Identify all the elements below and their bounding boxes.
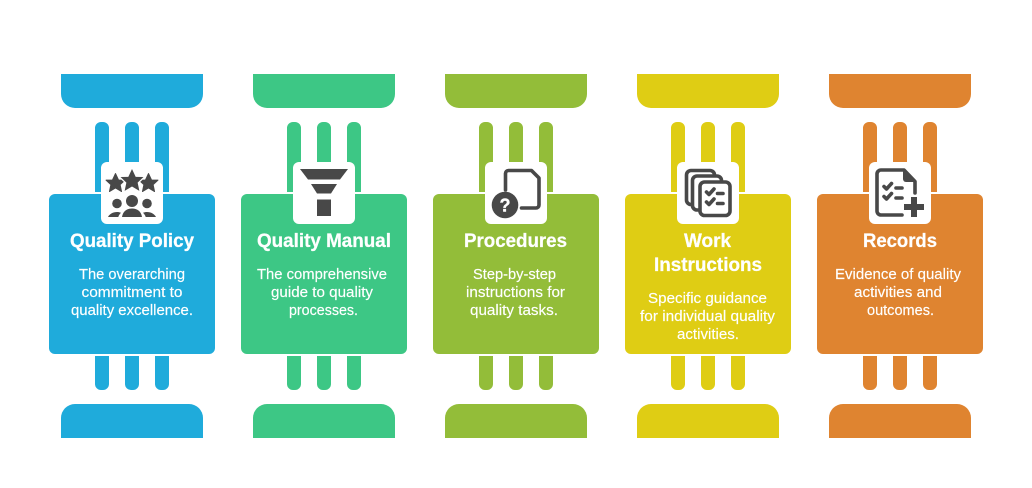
icon tile [293,162,355,224]
description: processes. [289,303,358,319]
top cap [637,74,779,108]
heading: Procedures [464,231,567,252]
heading: Quality Manual [257,231,391,252]
description: quality tasks. [470,303,558,319]
top bars [479,122,553,192]
heading: Records [863,231,937,252]
main card [817,194,983,354]
top cap [445,74,587,108]
heading: Instructions [654,255,762,276]
description: instructions for [466,285,565,301]
top cap [829,74,971,108]
icon: stacked checklists [686,170,730,216]
top cap [253,74,395,108]
icon: document with checklist and plus [877,170,924,217]
description: The comprehensive [257,267,387,283]
bottom cap [829,404,971,438]
description [466,267,565,319]
description: activities and [854,285,942,301]
bottom cap [637,404,779,438]
heading [654,231,762,276]
description: The overarching [79,267,185,283]
description: for individual quality [640,309,776,325]
description: quality excellence. [71,303,193,319]
description [71,267,193,319]
panel: Work Instructions [625,74,791,438]
description: outcomes. [867,303,934,319]
bottom cap [61,404,203,438]
main card [625,194,791,354]
panel: Procedures [433,74,599,438]
description: Step-by-step [473,267,556,283]
panel: Quality Manual [241,74,407,438]
icon: document with question mark: ? [500,196,510,216]
description: commitment to [82,285,182,301]
description: Evidence of quality [835,267,962,283]
panel: Quality Policy [49,74,215,438]
icon: document with question mark [492,170,539,218]
bottom cap [253,404,395,438]
icon tile [869,162,931,224]
icon tile [485,162,547,224]
description [640,291,776,343]
icon: funnel [300,169,348,216]
description: guide to quality [271,285,374,301]
icon: stars and people [106,169,158,217]
description [257,267,387,319]
top bars [671,122,745,192]
top bars [287,122,361,192]
bottom bars [671,356,745,390]
description: activities. [677,327,739,343]
top bars [95,122,169,192]
main card [433,194,599,354]
bottom bars [287,356,361,390]
bottom bars [863,356,937,390]
main card [49,194,215,354]
top cap [61,74,203,108]
bottom bars [95,356,169,390]
heading: Quality Policy [70,231,194,252]
panel: Records [817,74,983,438]
bottom cap [445,404,587,438]
description [835,267,962,319]
main card [241,194,407,354]
heading: Work [684,231,731,252]
bottom bars [479,356,553,390]
icon tile [677,162,739,224]
top bars [863,122,937,192]
icon tile [101,162,163,224]
description: Specific guidance [648,291,767,307]
